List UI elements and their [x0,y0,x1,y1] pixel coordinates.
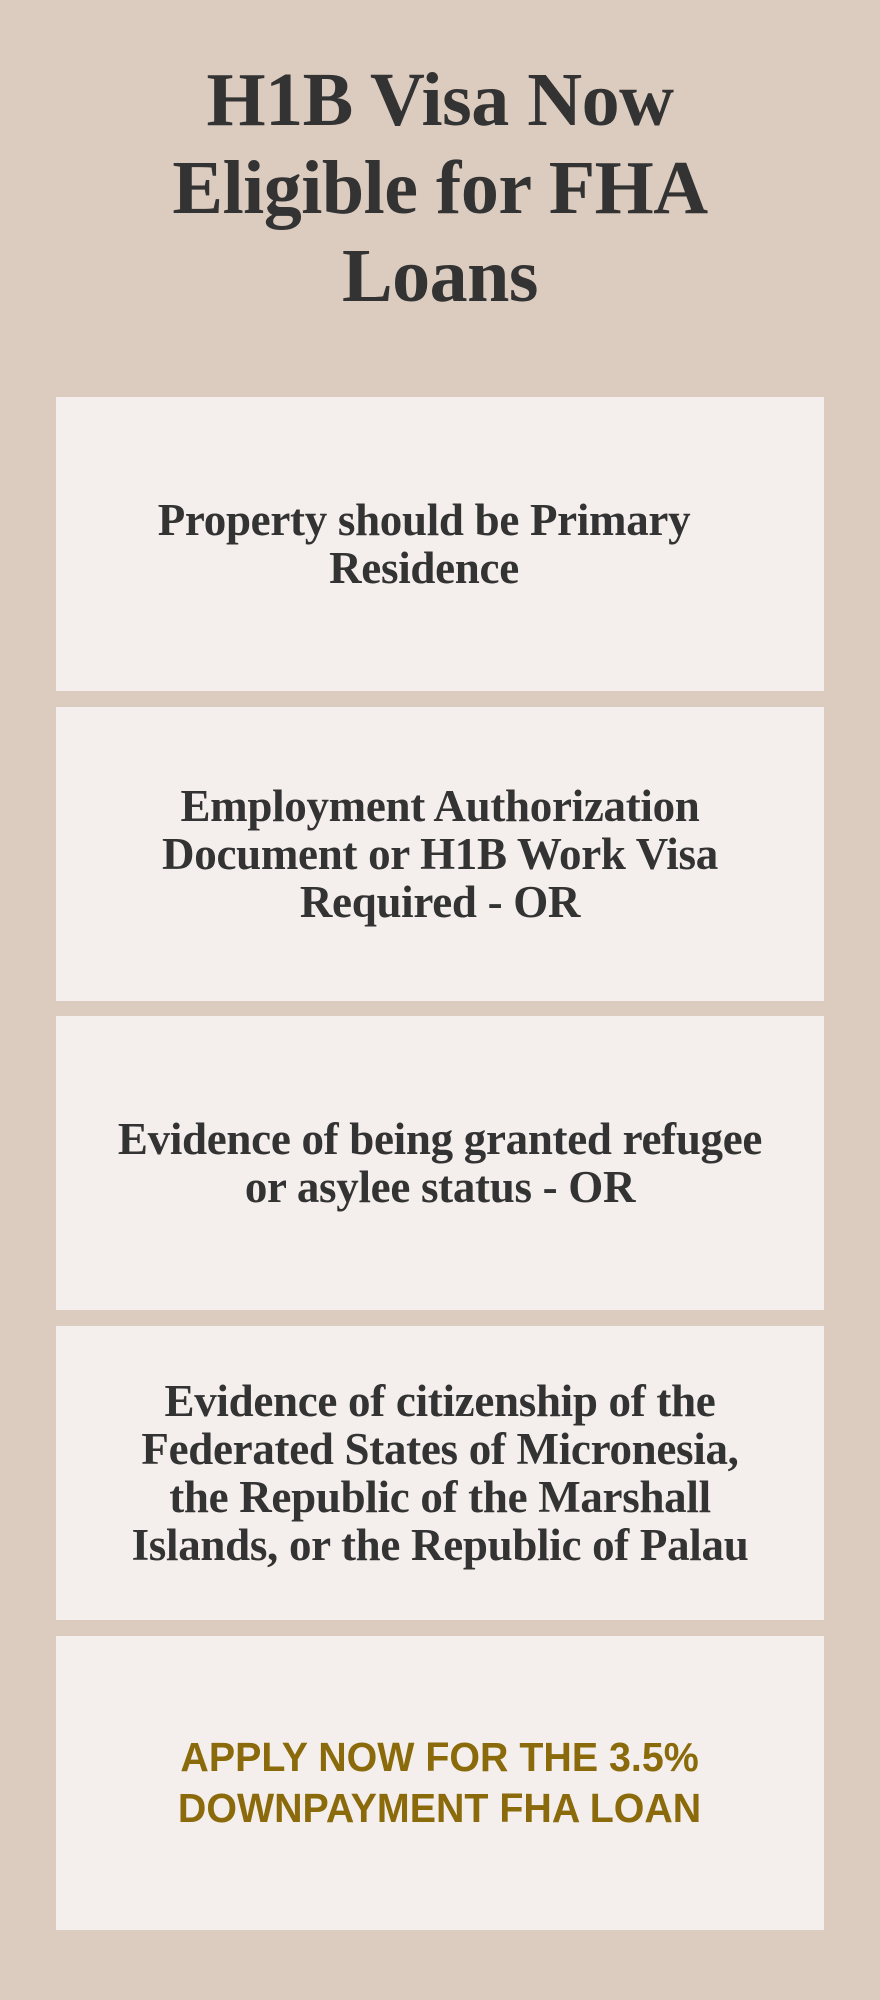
text: primary residence [158,495,690,593]
text: refugee status: Evidence of being granted refugee [118,1114,762,1164]
title: H1B Visa Now [207,58,673,142]
panel: call to action [56,1636,824,1930]
text: employment authorization: Document or H1B Work Visa [162,829,718,879]
text: citizenship [132,1376,748,1570]
text: refugee status: or asylee status - OR [245,1162,635,1212]
text: call to action: DOWNPAYMENT FHA LOAN [178,1785,702,1831]
text: primary residence: Property should be Primary [158,495,690,545]
text: call to action [178,1734,702,1831]
text: employment authorization: Required - OR [300,877,580,927]
panel: citizenship [56,1326,824,1620]
panel: primary residence [56,397,824,691]
title [172,58,708,318]
text: employment authorization [162,781,718,927]
panel: refugee status [56,1016,824,1310]
text: citizenship: Islands, or the Republic of Palau [132,1520,748,1570]
text: citizenship: Federated States of Micronesia, [141,1424,739,1474]
text: citizenship: the Republic of the Marshall [169,1472,711,1522]
text: refugee status [118,1114,762,1212]
text: call to action: APPLY NOW FOR THE 3.5% [181,1734,699,1780]
text: citizenship: Evidence of citizenship of the [165,1376,715,1426]
text: primary residence: Residence [329,543,519,593]
text: employment authorization: Employment Authorization [180,781,700,831]
title: Eligible for FHA [172,146,708,230]
title: Loans [342,234,538,318]
panel: employment authorization [56,707,824,1001]
